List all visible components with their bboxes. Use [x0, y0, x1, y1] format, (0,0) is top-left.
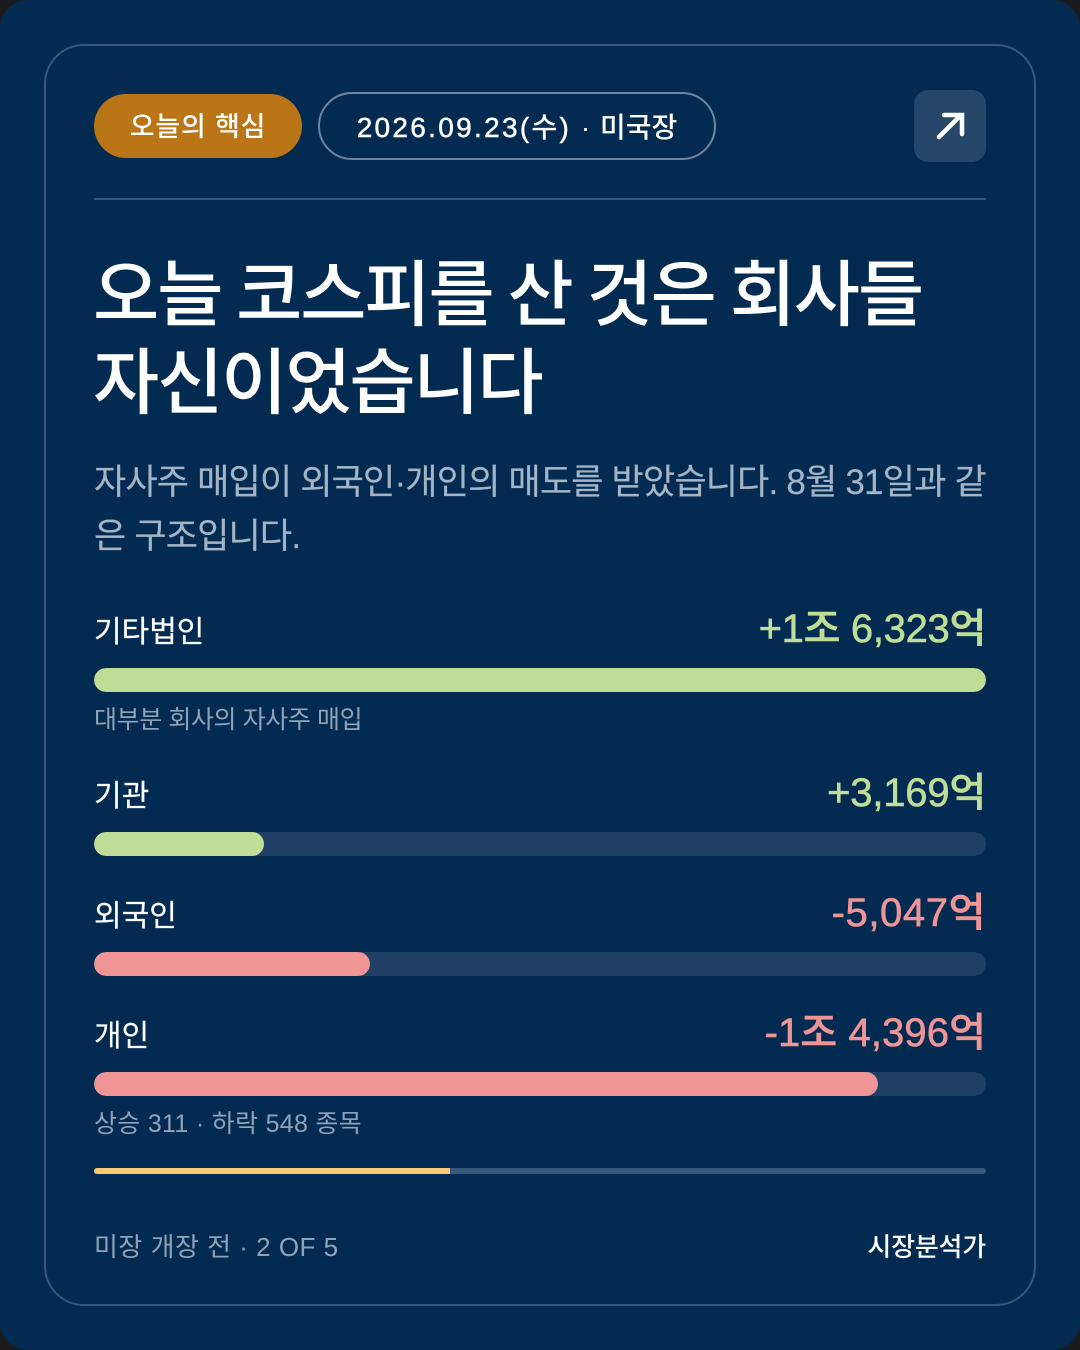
label: 기타법인 — [94, 607, 204, 651]
icon: arrow button — [914, 90, 986, 162]
subtitle — [94, 463, 986, 556]
badge: today's key point: 오늘의 핵심 — [130, 105, 266, 144]
row: foreigners — [94, 891, 986, 976]
header divider — [94, 198, 986, 200]
progress bar — [94, 1168, 986, 1174]
bar — [94, 952, 986, 976]
date pill — [318, 92, 716, 160]
badge: today's key point — [94, 94, 302, 158]
date pill: 2026.09.23(수) · 미국장 — [357, 106, 677, 146]
label: 개인 — [94, 1011, 149, 1055]
title: 자신이었습니다 — [93, 324, 542, 429]
note: 대부분 회사의 자사주 매입 — [94, 706, 362, 734]
note: 상승 311 · 하락 548 종목 — [94, 1110, 362, 1138]
row: other corporations — [94, 607, 986, 734]
label: 외국인 — [94, 891, 177, 935]
label: 기관 — [94, 771, 149, 815]
row: individuals — [94, 1011, 986, 1138]
footer left text: 미장 개장 전 · 2 OF 5 — [94, 1232, 339, 1262]
value: -1조 4,396억 — [765, 1011, 986, 1055]
value: +3,169억 — [827, 771, 986, 815]
subtitle: 자사주 매입이 외국인·개인의 매도를 받았습니다. 8월 31일과 같 — [94, 463, 986, 502]
row: institutions — [94, 771, 986, 856]
subtitle: 은 구조입니다. — [94, 517, 300, 556]
footer right text: 시장분석가 — [867, 1227, 986, 1264]
value: +1조 6,323억 — [759, 607, 986, 651]
bar — [94, 1072, 986, 1096]
bar — [94, 668, 986, 692]
progress fill — [94, 1168, 450, 1174]
title — [93, 236, 922, 429]
bar — [94, 832, 986, 856]
value: -5,047억 — [832, 891, 986, 935]
title: 오늘 코스피를 산 것은 회사들 — [93, 236, 922, 341]
